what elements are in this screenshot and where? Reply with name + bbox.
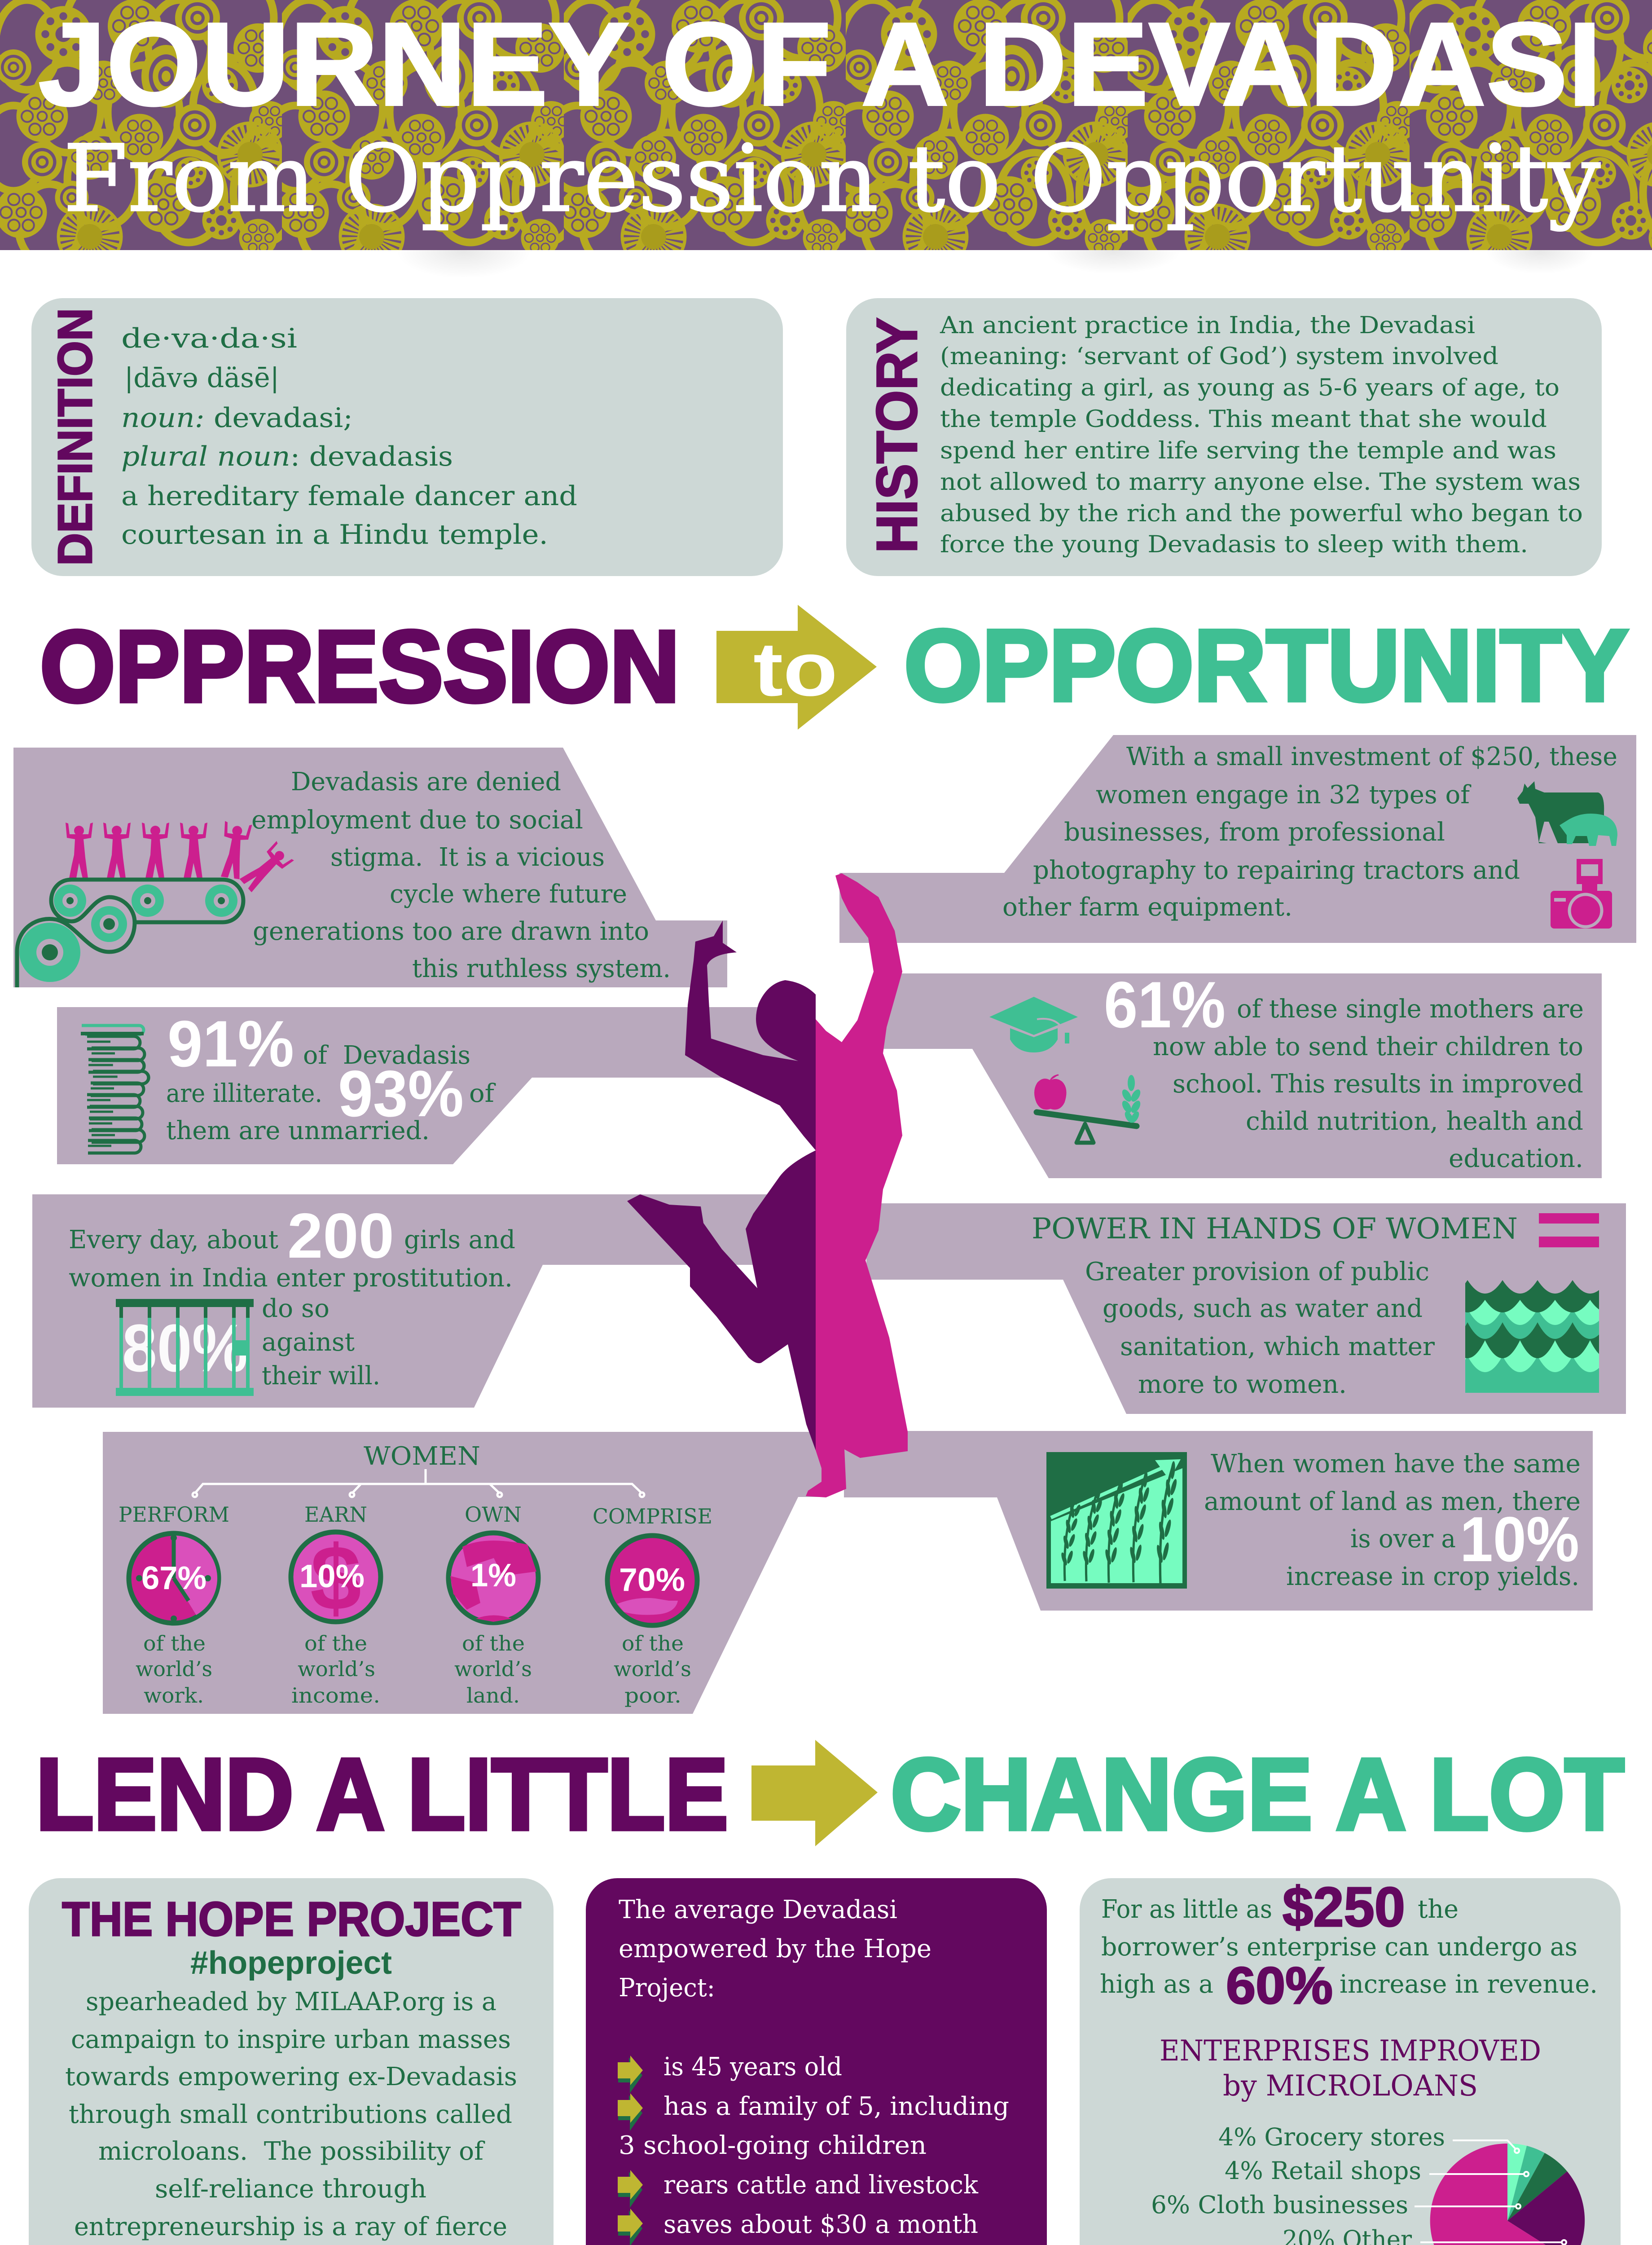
panel text: microloans. The possibility of bbox=[98, 2137, 485, 2166]
definition text: de·va·da·si bbox=[121, 323, 297, 354]
column: comprise bbox=[593, 1504, 712, 1708]
panel: land and crops bbox=[844, 1431, 1593, 1611]
column: perform: work. bbox=[144, 1683, 204, 1708]
panel text: education. bbox=[1449, 1144, 1583, 1173]
chart heading bbox=[1160, 2034, 1541, 2103]
panel text: through small contributions called bbox=[69, 2100, 512, 2129]
icon: conveyor belt with dancers bbox=[17, 821, 294, 987]
column: earn bbox=[291, 1502, 381, 1708]
bullet list: has a family of 5, including bbox=[663, 2092, 1009, 2121]
definition label: DEFINITION bbox=[48, 308, 102, 566]
panel text: Devadasis are denied bbox=[291, 767, 561, 797]
history text: the temple Goddess. This meant that she would bbox=[940, 406, 1547, 433]
pie labels: 4% Retail shops bbox=[1225, 2157, 1421, 2185]
panel text: do so bbox=[262, 1294, 330, 1323]
panel text: When women have the same bbox=[1211, 1449, 1581, 1479]
panel: power in hands of women bbox=[866, 1203, 1626, 1414]
heading: lend a little: LEND A LITTLE bbox=[36, 1737, 728, 1851]
stat: 200: 200 bbox=[287, 1200, 394, 1272]
column: comprise: poor. bbox=[624, 1683, 681, 1708]
chart heading: by MICROLOANS bbox=[1223, 2069, 1478, 2103]
panel text: amount of land as men, there bbox=[1204, 1487, 1581, 1516]
panel text bbox=[1085, 1257, 1435, 1399]
panel text: Greater provision of public bbox=[1085, 1257, 1429, 1286]
tree connector bbox=[193, 1469, 644, 1497]
history label: HISTORY bbox=[865, 317, 929, 553]
history text bbox=[940, 312, 1583, 558]
hashtag: #hopeproject bbox=[190, 1945, 392, 1981]
column: own: OWN bbox=[465, 1502, 522, 1527]
panel: prostitution bbox=[32, 1194, 808, 1408]
panel text: of Devadasis bbox=[303, 1041, 470, 1070]
column: perform: PERFORM bbox=[119, 1502, 229, 1527]
panel text: are illiterate. bbox=[166, 1079, 322, 1108]
column: earn: world’s bbox=[298, 1657, 375, 1681]
bullet list bbox=[618, 2052, 1009, 2245]
panel text: this ruthless system. bbox=[412, 954, 671, 983]
panel text: women engage in 32 types of bbox=[1096, 780, 1472, 810]
panel text: photography to repairing tractors and bbox=[1033, 856, 1520, 885]
column: own bbox=[448, 1502, 538, 1708]
stat: 93 percent: 93% bbox=[338, 1057, 464, 1130]
column: comprise: world’s bbox=[614, 1657, 691, 1681]
panel text: employment due to social bbox=[251, 806, 583, 835]
panel text bbox=[1204, 1449, 1581, 1591]
icon: camera bbox=[1551, 859, 1612, 929]
panel: definition bbox=[31, 298, 783, 576]
pie labels bbox=[1151, 2123, 1445, 2245]
column: perform: 67% bbox=[141, 1560, 206, 1596]
panel heading: THE HOPE PROJECT bbox=[62, 1892, 521, 1946]
history text: An ancient practice in India, the Devadasi bbox=[940, 312, 1475, 339]
icon: water waves bbox=[1465, 1280, 1599, 1393]
bullet list: saves about $30 a month bbox=[663, 2210, 978, 2239]
heading: oppression: OPPRESSION bbox=[40, 609, 680, 723]
definition text: a hereditary female dancer and bbox=[121, 480, 577, 512]
column: perform: of the bbox=[143, 1631, 206, 1655]
arrow: to bbox=[716, 605, 877, 730]
panel text: cycle where future bbox=[390, 880, 627, 909]
panel text: women in India enter prostitution. bbox=[69, 1263, 513, 1293]
pie leader lines bbox=[1415, 2140, 1566, 2245]
panel text: stigma. It is a vicious bbox=[330, 843, 605, 872]
heading: change a lot: CHANGE A LOT bbox=[891, 1737, 1624, 1851]
panel text: now able to send their children to bbox=[1153, 1032, 1583, 1061]
column: earn: 10% bbox=[299, 1558, 365, 1594]
panel text bbox=[619, 1895, 931, 2003]
column: own: world’s bbox=[454, 1657, 532, 1681]
panel text bbox=[65, 1987, 517, 2245]
column: earn: EARN bbox=[304, 1502, 367, 1527]
bullet list: rears cattle and livestock bbox=[663, 2170, 979, 2200]
panel text bbox=[251, 767, 671, 983]
header banner bbox=[0, 0, 1652, 250]
title: JOURNEY OF A DEVADASI bbox=[38, 0, 1602, 130]
panel text bbox=[69, 1225, 515, 1391]
panel text: is over a bbox=[1350, 1524, 1456, 1554]
panel text: the bbox=[1418, 1895, 1459, 1924]
panel: investment bbox=[839, 735, 1636, 943]
panel text: The average Devadasi bbox=[619, 1895, 897, 1924]
panel text bbox=[1153, 995, 1584, 1173]
panel text: increase in revenue. bbox=[1340, 1970, 1598, 1999]
panel text: sanitation, which matter bbox=[1120, 1332, 1435, 1361]
icon: wheat growth chart bbox=[1046, 1452, 1187, 1589]
panel text: of bbox=[469, 1079, 496, 1108]
stat: 60 percent: 60% bbox=[1226, 1956, 1333, 2015]
panel text: With a small investment of $250, these bbox=[1126, 742, 1617, 771]
column: earn: of the bbox=[304, 1631, 367, 1655]
arrow: to: to bbox=[753, 627, 838, 712]
panel text: school. This results in improved bbox=[1173, 1070, 1583, 1099]
panel text: high as a bbox=[1100, 1970, 1213, 1999]
column: comprise: of the bbox=[622, 1631, 684, 1655]
arrow: lend to change bbox=[751, 1740, 878, 1846]
panel text: of these single mothers are bbox=[1237, 995, 1584, 1024]
panel text: campaign to inspire urban masses bbox=[71, 2025, 511, 2054]
definition text: courtesan in a Hindu temple. bbox=[121, 519, 548, 550]
panel: history bbox=[846, 298, 1602, 576]
dancer silhouette bbox=[627, 873, 908, 1497]
history text: abused by the rich and the powerful who began to bbox=[940, 500, 1583, 527]
women heading: WOMEN bbox=[364, 1442, 480, 1471]
panel text: against bbox=[262, 1328, 355, 1357]
icon: equals sign bbox=[1539, 1213, 1599, 1247]
panel: illiteracy bbox=[57, 1007, 808, 1164]
pie labels: 4% Grocery stores bbox=[1218, 2123, 1445, 2151]
panel heading: POWER IN HANDS OF WOMEN bbox=[1032, 1212, 1518, 1246]
stat: 61 percent: 61% bbox=[1104, 968, 1226, 1041]
panel text: more to women. bbox=[1138, 1370, 1347, 1399]
panel text: businesses, from professional bbox=[1064, 818, 1445, 847]
stat: 250 dollars: $250 bbox=[1283, 1876, 1405, 1938]
column: own: of the bbox=[462, 1631, 525, 1655]
panel: average devadasi bbox=[586, 1878, 1047, 2245]
definition text bbox=[121, 323, 577, 550]
panel text bbox=[1100, 1895, 1598, 1999]
column: earn: $ bbox=[310, 1527, 361, 1629]
panel: education bbox=[875, 968, 1602, 1178]
panel text bbox=[1002, 742, 1617, 922]
panel text: goods, such as water and bbox=[1103, 1294, 1423, 1323]
stat: 10 percent: 10% bbox=[1460, 1504, 1579, 1575]
heading: opportunity: OPPORTUNITY bbox=[904, 608, 1628, 722]
column: perform: world’s bbox=[136, 1657, 212, 1681]
panel text: generations too are drawn into bbox=[253, 917, 649, 946]
panel text: empowered by the Hope bbox=[619, 1934, 931, 1963]
definition text: |dāvə däsē| bbox=[124, 362, 279, 394]
stat: 80 percent in cage: 80% bbox=[122, 1310, 248, 1386]
panel text: entrepreneurship is a ray of fierce bbox=[74, 2212, 507, 2241]
history text: not allowed to marry anyone else. The system was bbox=[940, 469, 1581, 496]
panel text: For as little as bbox=[1101, 1895, 1272, 1924]
pie labels: 6% Cloth businesses bbox=[1151, 2191, 1408, 2219]
panel: microloans bbox=[1080, 1876, 1621, 2245]
panel text: them are unmarried. bbox=[166, 1116, 430, 1145]
panel text: towards empowering ex-Devadasis bbox=[65, 2062, 517, 2091]
bullet list: is 45 years old bbox=[663, 2052, 842, 2082]
history text: dedicating a girl, as young as 5-6 years of age, to bbox=[940, 374, 1560, 401]
icon: balance with apple and wheat bbox=[1035, 1075, 1142, 1143]
panel text: Project: bbox=[619, 1973, 715, 2003]
panel text: self-reliance through bbox=[155, 2175, 426, 2204]
panel text bbox=[166, 1041, 496, 1145]
subtitle: From Oppression to Opportunity bbox=[63, 126, 1600, 233]
icon: stack of books bbox=[81, 1026, 149, 1153]
stat: 91 percent: 91% bbox=[167, 1007, 294, 1080]
chart heading: ENTERPRISES IMPROVED bbox=[1160, 2034, 1541, 2068]
panel text: their will. bbox=[262, 1361, 380, 1391]
icon: cow and pig bbox=[1517, 781, 1617, 846]
pie chart bbox=[1430, 2144, 1585, 2245]
definition text: plural noun : devadasis bbox=[121, 441, 453, 472]
panel text: Every day, about bbox=[69, 1225, 278, 1255]
panel: the hope project bbox=[29, 1878, 554, 2245]
column: own: land. bbox=[466, 1683, 520, 1708]
panel text: spearheaded by MILAAP.org is a bbox=[86, 1987, 496, 2016]
panel text: borrower’s enterprise can undergo as bbox=[1101, 1932, 1577, 1962]
history text: spend her entire life serving the temple and was bbox=[940, 437, 1556, 464]
panel text: girls and bbox=[404, 1225, 515, 1255]
history text: force the young Devadasis to sleep with them. bbox=[940, 531, 1528, 558]
history text: (meaning: ‘servant of God’) system involved bbox=[940, 343, 1498, 370]
panel text: child nutrition, health and bbox=[1246, 1107, 1583, 1136]
column: own: 1% bbox=[470, 1558, 516, 1594]
column: perform bbox=[119, 1502, 229, 1708]
panel text: increase in crop yields. bbox=[1286, 1562, 1579, 1591]
column: earn: income. bbox=[291, 1683, 380, 1708]
column: comprise: 70% bbox=[619, 1562, 685, 1598]
panel: women statistics bbox=[103, 1432, 822, 1714]
panel text: other farm equipment. bbox=[1002, 893, 1292, 922]
icon: graduation cap bbox=[989, 997, 1078, 1052]
definition text: noun: devadasi; bbox=[121, 402, 353, 434]
bullet list: 3 school-going children bbox=[619, 2131, 927, 2160]
panel: denied employment bbox=[13, 748, 727, 987]
column: comprise: COMPRISE bbox=[593, 1504, 712, 1528]
